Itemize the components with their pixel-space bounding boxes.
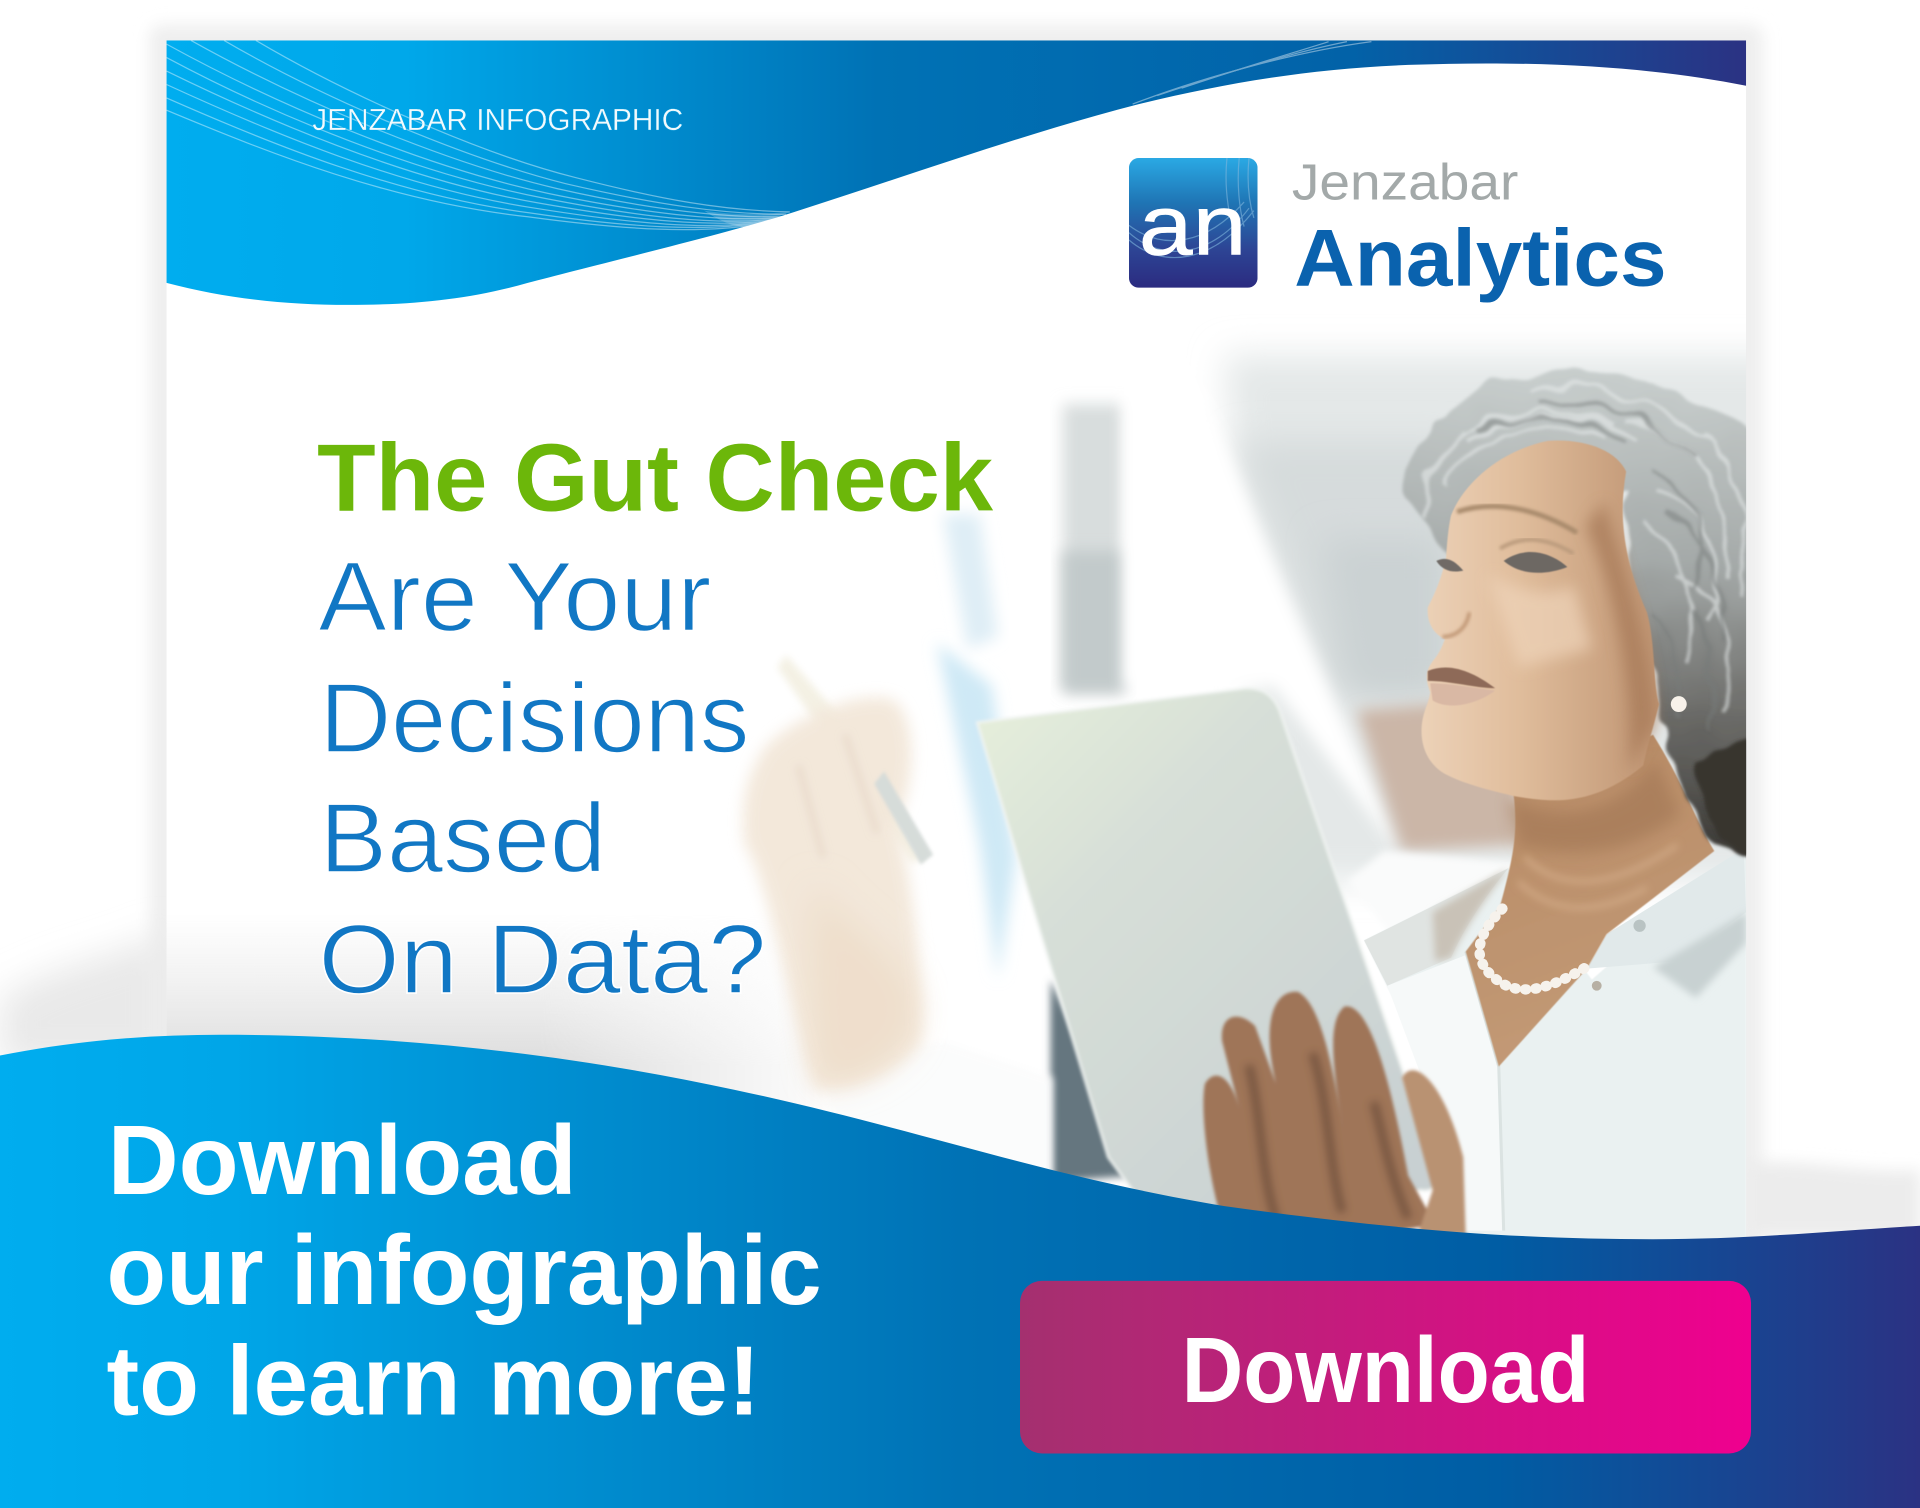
photo: shirt [1364, 845, 1746, 1255]
photo: raised hand with pen [743, 655, 1053, 1182]
photo: floor shading [166, 955, 774, 1098]
call to action text: Download [108, 1105, 577, 1215]
top wave band [167, 40, 1746, 305]
download button [1020, 1281, 1751, 1453]
heading: question lines: Are Your [318, 542, 711, 652]
photo: neck [1466, 735, 1714, 1067]
heading: green line: The Gut Check [317, 426, 994, 532]
bottom wave band [0, 1035, 1920, 1508]
photo: blurred office background [937, 306, 1837, 1182]
panel: card [167, 40, 1837, 1255]
heading: question lines: Decisions [320, 663, 749, 773]
heading: question lines: Based [320, 783, 606, 893]
logo icon: an [1139, 178, 1247, 274]
call to action text: our infographic [107, 1215, 822, 1325]
logo: Jenzabar wordmark: Jenzabar [1292, 153, 1518, 211]
heading: question lines [318, 542, 767, 1014]
download button: Download [1182, 1318, 1589, 1422]
heading [317, 426, 994, 1014]
eyebrow label: JENZABAR INFOGRAPHIC [312, 103, 683, 137]
heading: question lines: On Data? [318, 904, 767, 1014]
call to action text [107, 1105, 822, 1435]
photo: face [1422, 441, 1687, 800]
logo: Analytics wordmark: Analytics [1294, 213, 1667, 303]
photo: hair [1408, 372, 1763, 857]
logo icon [1129, 158, 1258, 288]
photo: tablet [977, 688, 1438, 1249]
photo: necklace [1480, 909, 1586, 989]
call to action text: to learn more! [107, 1325, 760, 1435]
wave line pattern [167, 40, 1371, 230]
photo: hand on tablet [1203, 992, 1466, 1239]
